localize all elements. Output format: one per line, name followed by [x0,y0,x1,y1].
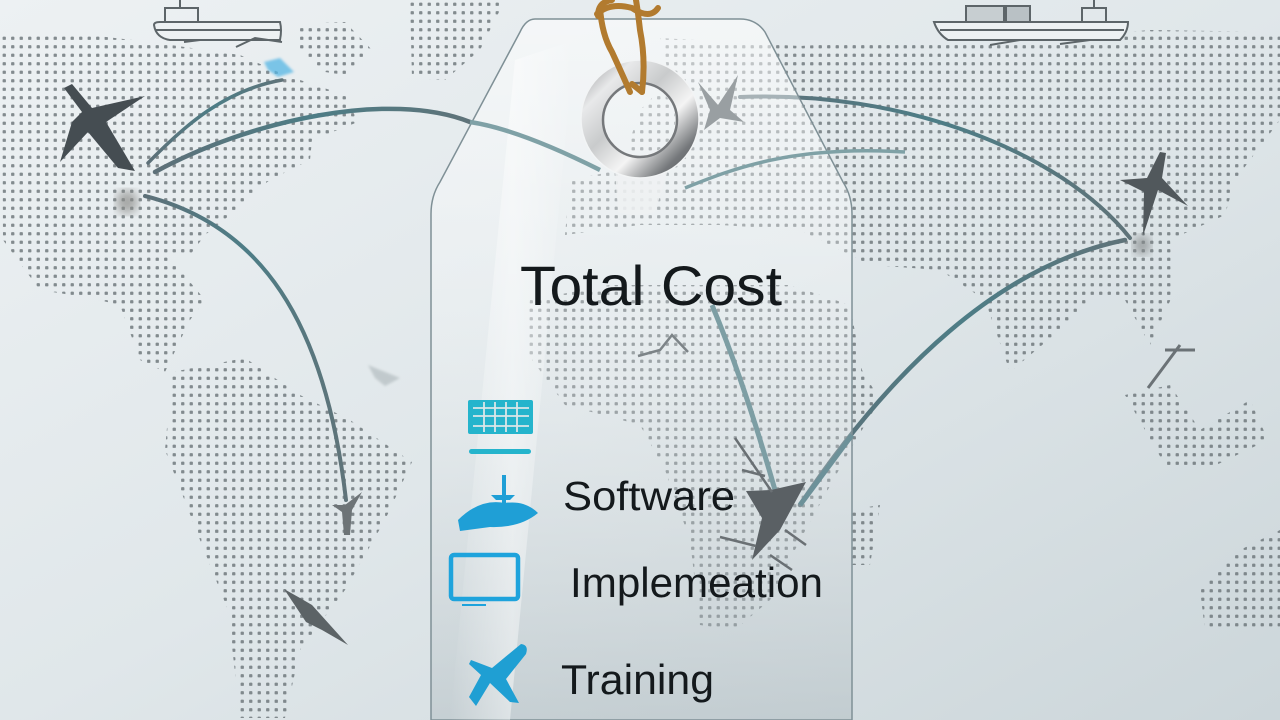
icon: plane, Africa [720,438,806,570]
tag: rope [597,0,658,92]
arc: North America to Greenland [148,80,282,163]
arc: North America across Atlantic [155,109,470,172]
arc: Asia to Africa [800,240,1125,505]
map: Greenland [295,22,372,75]
location glow: Asia [1133,235,1151,255]
tag: eyelet inner rim [603,83,677,157]
price tag [431,0,905,720]
tag: small arrow mark [638,335,688,356]
arc: through tag right [685,151,905,188]
icon: monitor [451,555,518,606]
tag: glass body [431,19,852,720]
map: Africa [525,285,880,630]
accent: blue splash [264,58,294,77]
map: Australia [1200,530,1280,630]
arc: tag edge to Africa [800,435,852,505]
ship: left [154,0,282,47]
icon: hand with water drop [458,475,538,531]
tag: faint plane near eyelet [698,75,744,130]
icon: pen squiggle, Southeast Asia [1148,345,1195,388]
arc: through tag left [470,122,600,170]
row: training [469,644,714,706]
map: Arctic islands [410,0,505,80]
tag: eyelet [581,60,699,178]
arc: North America to South America [145,196,346,500]
tag: light sheen [450,40,575,720]
route arcs [145,80,1130,505]
icon: keyboard [468,400,533,454]
map: Eurasia [565,30,1280,372]
map: South America [165,358,412,718]
tag: eyelet shadow tail [615,170,668,215]
row: implementation [451,555,823,606]
icon: plane, southern ocean [284,589,348,645]
icon: plane, South America [332,492,362,535]
map: Southeast Asia islands [1125,385,1268,468]
row: software [458,400,735,531]
map: Madagascar [850,505,880,565]
icon: plane, Asia [1120,152,1188,236]
arc: through tag to Africa [712,305,775,490]
label: implementation: Implemeation [570,559,823,606]
title: Total Cost [520,254,782,317]
label: software: Software [563,473,735,519]
icon: plane, North America [60,84,145,171]
map: North America [2,34,358,372]
arc: Asia to Europe [740,96,1130,238]
location glow: North America [116,190,138,214]
icon: plane [469,644,527,706]
icon: plane faint, Atlantic [368,365,400,386]
ship: right [934,0,1128,45]
label: training: Training [561,656,714,703]
